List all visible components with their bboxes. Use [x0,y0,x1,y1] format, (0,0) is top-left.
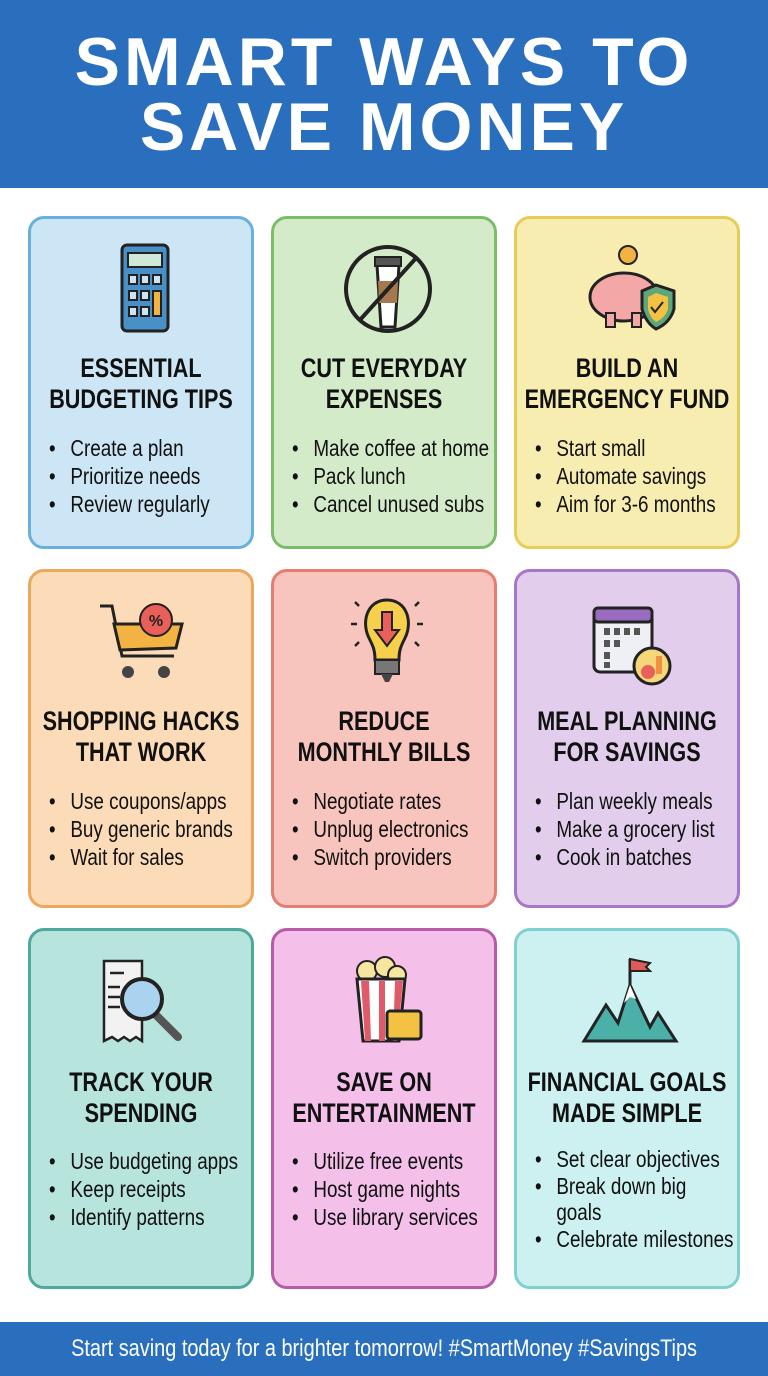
panel: emergency fund [514,216,740,549]
list: Unplug electronics [313,816,468,842]
icon: popcorn ticket [355,956,422,1042]
title: SAVE MONEY [140,89,628,165]
list: Use coupons/apps [70,788,227,814]
panel: tracking [28,928,254,1289]
list: Use budgeting apps [70,1148,238,1174]
icon: lightbulb [351,598,423,682]
heading: ENTERTAINMENT [292,1098,476,1128]
heading: MEAL PLANNING [537,706,717,736]
list: Buy generic brands [70,816,233,842]
list: Create a plan [70,435,184,461]
panel: entertainment [271,928,497,1289]
title: SMART WAYS TO [75,24,693,100]
heading: REDUCE [338,706,430,736]
heading: MADE SIMPLE [552,1098,702,1128]
icon: no coffee [344,245,432,333]
heading: ESSENTIAL [80,353,202,383]
heading: EXPENSES [326,384,442,414]
icon: cart [100,603,184,678]
list: goals [556,1199,601,1225]
heading: SHOPPING HACKS [43,706,239,736]
heading [301,353,467,414]
heading [298,706,470,767]
heading [528,1067,726,1128]
list: Start small [556,435,645,461]
list: Use library services [313,1204,478,1230]
heading: BUILD AN [576,353,678,383]
list: Aim for 3-6 months [556,491,716,517]
footer: Start saving today for a brighter tomorrow! #SmartMoney #SavingsTips [71,1335,697,1362]
heading [292,1067,476,1128]
heading: TRACK YOUR [69,1067,213,1097]
list [292,1148,478,1230]
list: Cook in batches [556,844,692,870]
heading: SAVE ON [336,1067,432,1097]
icon: cart: % [149,613,163,630]
list: Automate savings [556,463,706,489]
list: Host game nights [313,1176,460,1202]
panel: goals [514,928,740,1289]
icon: piggy bank [588,245,676,331]
list: Keep receipts [70,1176,186,1202]
heading: FOR SAVINGS [553,737,701,767]
panel: shopping [28,569,254,908]
list: Utilize free events [313,1148,463,1174]
heading: BUDGETING TIPS [49,384,233,414]
list: Celebrate milestones [556,1226,733,1252]
list [292,435,489,517]
list: Identify patterns [70,1204,205,1230]
footer [0,1322,768,1376]
heading [69,1067,213,1128]
list [536,435,716,517]
list: Review regularly [70,491,210,517]
list: Break down big [556,1172,686,1198]
list [292,788,468,870]
heading: CUT EVERYDAY [301,353,467,383]
panel: bills [271,569,497,908]
list: Make coffee at home [313,435,489,461]
title [75,24,693,165]
list: Cancel unused subs [313,491,484,517]
icon: calculator [120,244,170,332]
list: Negotiate rates [313,788,441,814]
list [536,788,715,870]
icon: receipt magnifier [102,960,182,1044]
panel: budgeting [28,216,254,549]
heading: SPENDING [85,1098,197,1128]
list: Prioritize needs [70,463,200,489]
header [0,0,768,188]
icon: calendar [592,606,672,686]
heading [525,353,729,414]
heading: FINANCIAL GOALS [528,1067,726,1097]
panel: expenses [271,216,497,549]
list [50,435,210,517]
heading: EMERGENCY FUND [525,384,729,414]
heading: THAT WORK [76,737,206,767]
heading [537,706,717,767]
list: Wait for sales [70,844,184,870]
list: Switch providers [313,844,452,870]
list: Set clear objectives [556,1146,720,1172]
heading: MONTHLY BILLS [298,737,470,767]
heading [43,706,239,767]
list: Make a grocery list [556,816,715,842]
heading [49,353,233,414]
list: Pack lunch [313,463,406,489]
panel: meal planning [514,569,740,908]
list: Plan weekly meals [556,788,713,814]
list [536,1146,733,1252]
icon: mountain flag [581,958,679,1042]
list [50,1148,238,1230]
list [50,788,233,870]
